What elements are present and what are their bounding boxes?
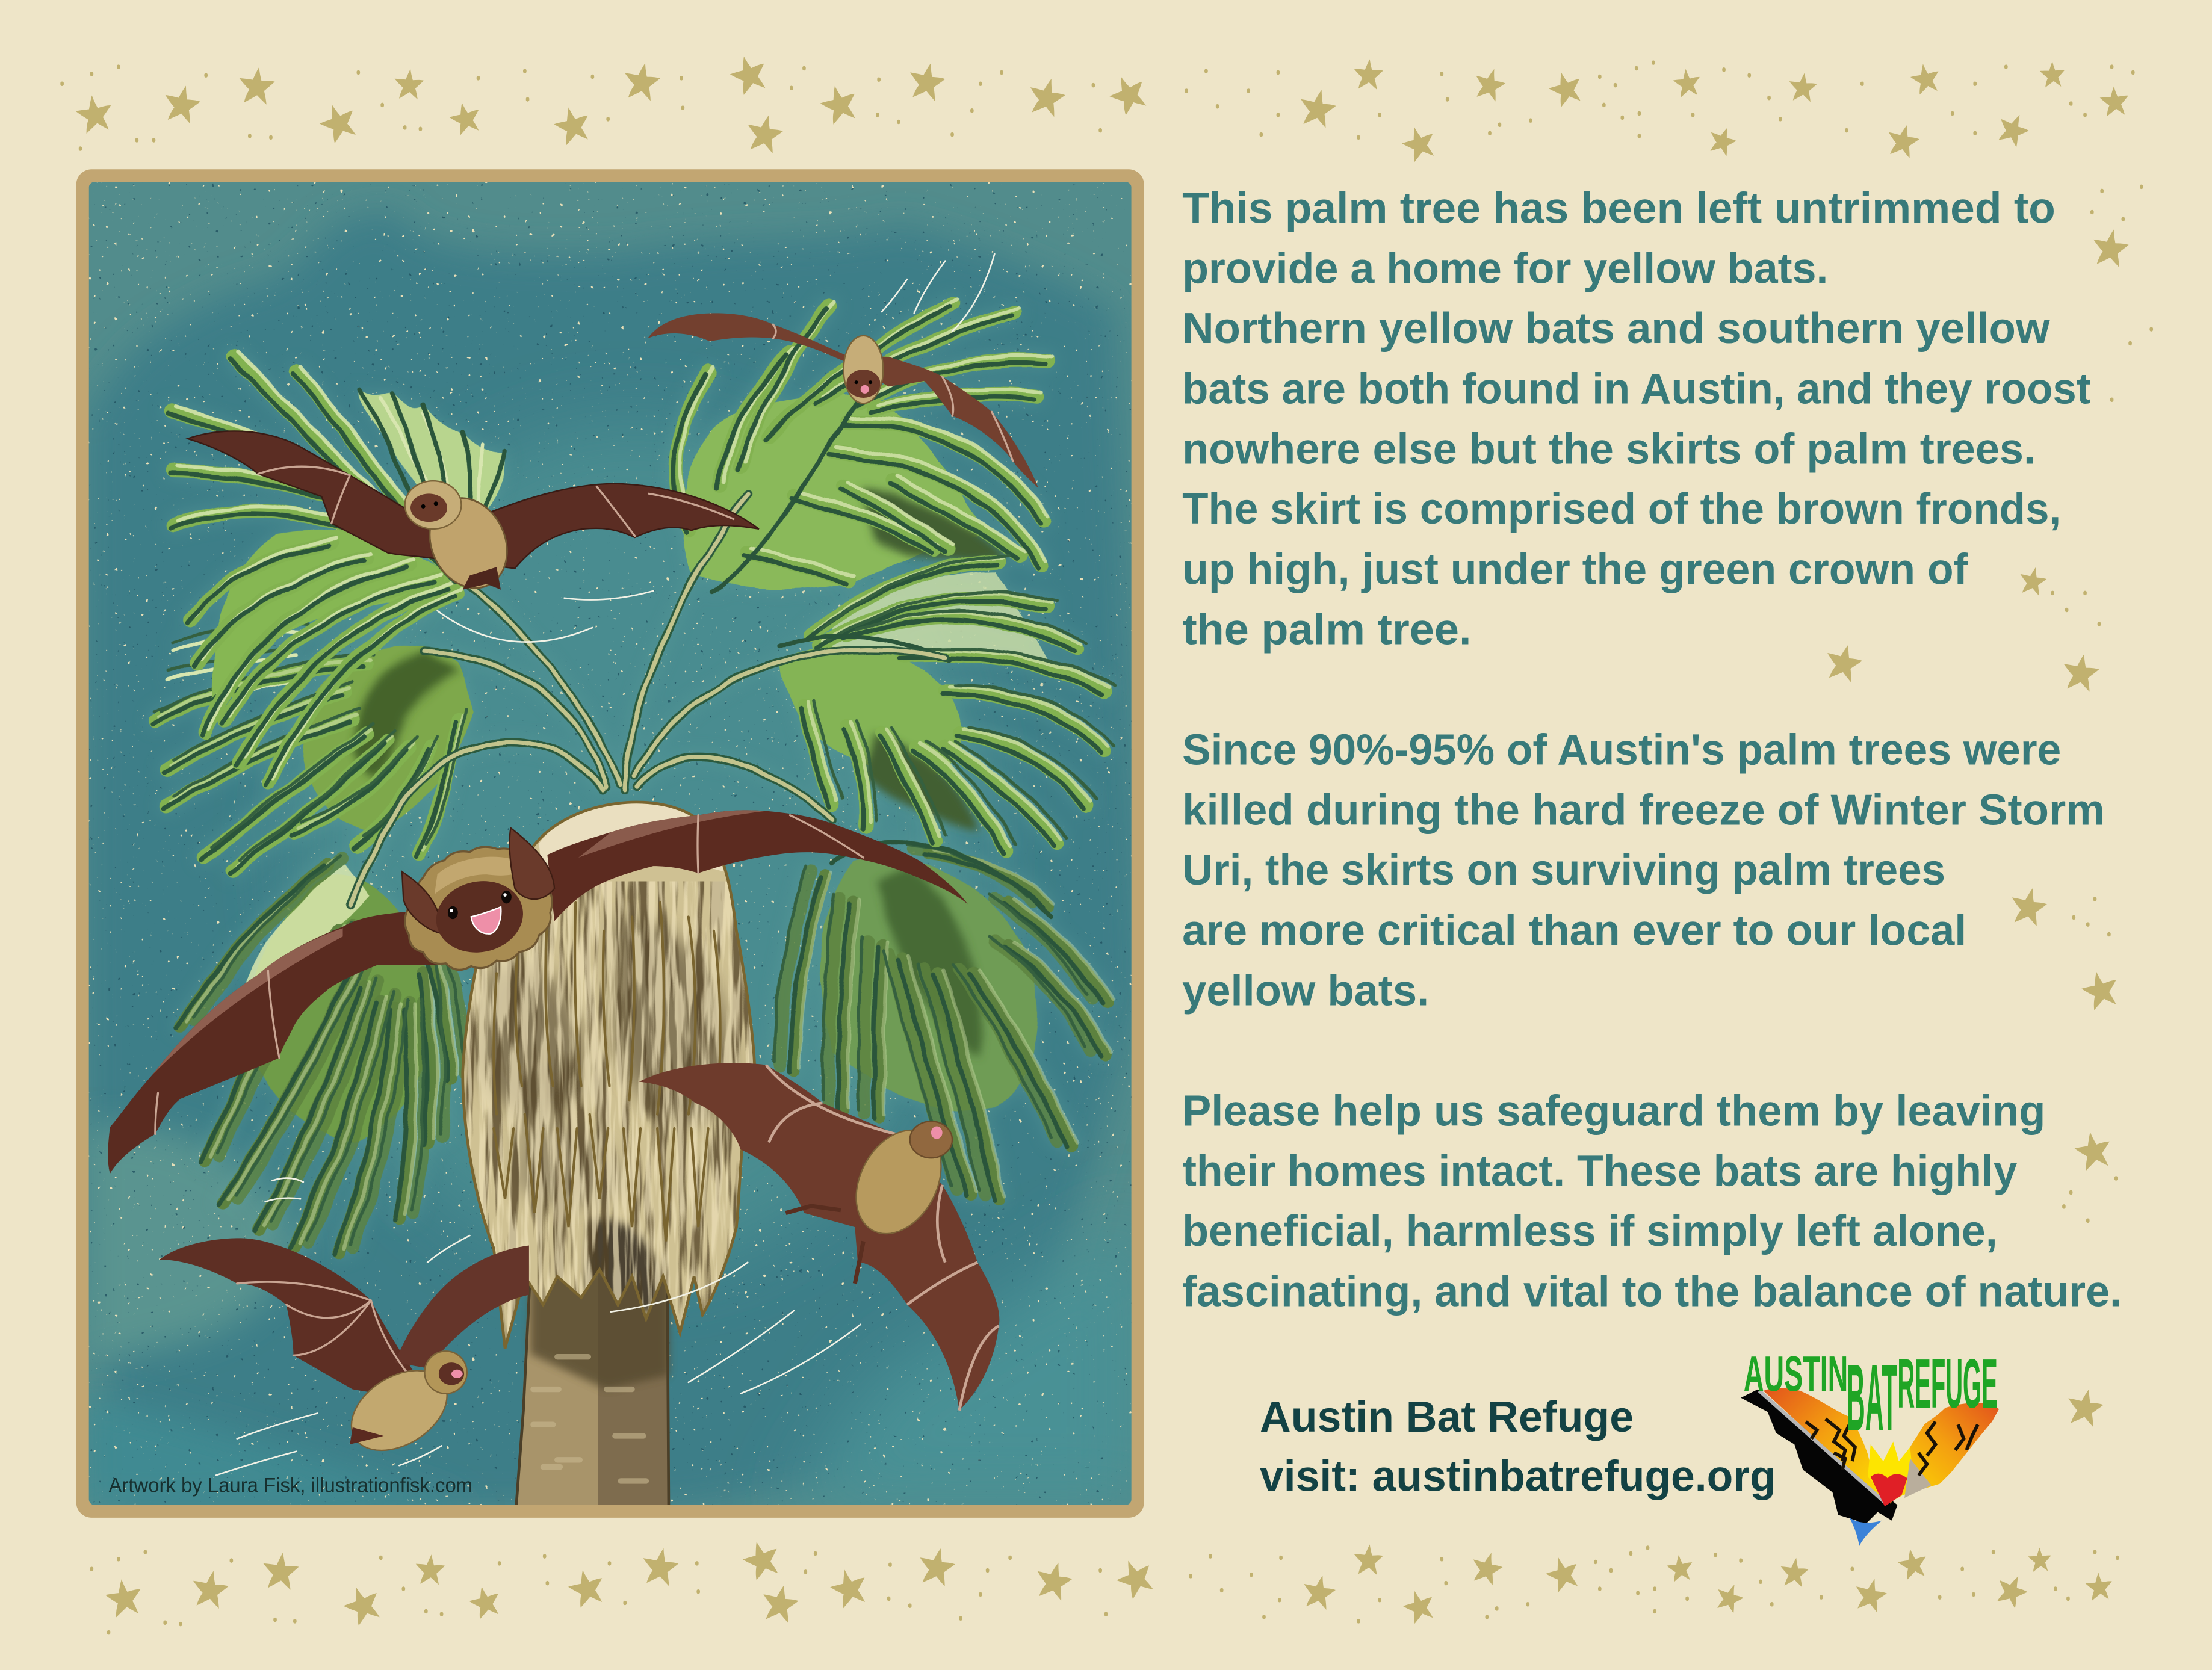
call to action: Austin Bat Refuge xyxy=(1260,1393,1634,1441)
orange right wing xyxy=(1888,1403,1999,1503)
star border: bottom xyxy=(103,1536,2113,1628)
skirt outline and strand tips xyxy=(463,802,755,1349)
bat: central front xyxy=(108,810,968,1174)
red M arches xyxy=(1871,1474,1907,1506)
left ear xyxy=(402,871,443,934)
paragraph: winter storm Uri: Uri, the skirts on surviving palm trees xyxy=(1182,846,1945,894)
paragraph: palm tree home: nowhere else but the skirts of palm trees. xyxy=(1182,424,2036,473)
bat: bottom left xyxy=(160,1238,529,1467)
bat: upper left xyxy=(188,431,759,601)
black left wing xyxy=(1741,1390,1897,1546)
dark patches xyxy=(472,965,586,1119)
paragraph: palm tree home: This palm tree has been left untrimmed to xyxy=(1182,184,2056,232)
paragraph: winter storm Uri: killed during the hard freeze of Winter Storm xyxy=(1182,785,2105,834)
grey wing bone xyxy=(1759,1391,1886,1503)
paragraph: palm tree home: the palm tree. xyxy=(1182,605,1472,654)
olive strand lines xyxy=(494,903,720,1241)
paragraph: winter storm Uri: Since 90%-95% of Austin's palm trees were xyxy=(1182,725,2061,774)
fur collar xyxy=(405,847,552,970)
frond: top right xyxy=(674,299,1052,592)
right wing xyxy=(547,810,968,921)
skirt strand mass xyxy=(451,790,762,1361)
dots: right margin xyxy=(2052,186,2151,1221)
open mouth xyxy=(471,907,501,934)
face xyxy=(430,873,530,960)
illustration: palm tree and bats xyxy=(85,182,1142,1509)
paragraph: winter storm Uri: yellow bats. xyxy=(1182,966,1429,1015)
logo wordmark: REFUGE xyxy=(1897,1346,1998,1423)
dark sky speckles xyxy=(89,182,1132,1505)
logo wordmark: BAT xyxy=(1847,1344,1897,1450)
logo wordmark xyxy=(1744,1344,1998,1450)
stars: right margin xyxy=(1823,227,2131,1428)
night sky background xyxy=(85,182,1142,1509)
bat: lower right xyxy=(639,1063,999,1411)
frond: lower left xyxy=(176,855,465,1254)
frond: right xyxy=(780,555,1115,853)
grey stepped tower xyxy=(1904,1458,1932,1498)
paragraph: palm tree home: The skirt is comprised of the brown fronds, xyxy=(1182,484,2061,533)
star dots: top xyxy=(62,62,2133,149)
call to action: visit: austinbatrefuge.org xyxy=(1260,1452,1776,1500)
logo: Austin Bat Refuge xyxy=(1741,1344,1999,1546)
frond: lower right xyxy=(775,842,1113,1201)
blue water tail xyxy=(1850,1518,1882,1546)
paragraph: please help: their homes intact. These bats are highly xyxy=(1182,1146,2018,1195)
logo wordmark: AUSTIN xyxy=(1744,1346,1848,1402)
motion lines xyxy=(216,254,994,1476)
paragraph: please help: beneficial, harmless if simply left alone, xyxy=(1182,1207,1998,1255)
left wing xyxy=(108,911,438,1174)
paragraph: palm tree home: Northern yellow bats and southern yellow xyxy=(1182,304,2050,353)
paragraph: please help: Please help us safeguard them by leaving xyxy=(1182,1086,2045,1135)
star border: top xyxy=(73,51,2130,164)
paragraph: palm tree home: up high, just under the green crown of xyxy=(1182,545,1968,593)
paragraph: winter storm Uri: are more critical than ever to our local xyxy=(1182,906,1966,954)
star dots: bottom xyxy=(91,1547,2118,1633)
right ear xyxy=(510,828,554,899)
paragraph: palm tree home: bats are both found in Austin, and they roost xyxy=(1182,364,2090,413)
illustration frame xyxy=(76,169,1144,1518)
orange left wing xyxy=(1764,1388,1886,1503)
body xyxy=(415,485,521,601)
sky speckles xyxy=(89,182,1132,1505)
paragraph: winter storm Uri xyxy=(1182,725,2105,1015)
head xyxy=(405,481,461,529)
paragraph: palm tree home: provide a home for yellow bats. xyxy=(1182,244,1829,292)
palm skirt: dried fronds xyxy=(451,790,762,1361)
frond stems xyxy=(350,493,945,906)
sun burst xyxy=(1868,1441,1913,1503)
artwork credit: Artwork by Laura Fisk, illustrationfisk.com xyxy=(108,1474,472,1497)
paragraph: please help xyxy=(1182,1086,2122,1316)
call to action xyxy=(1260,1393,1776,1500)
palm fronds xyxy=(152,299,1115,1254)
frond: center left drooping xyxy=(152,645,472,873)
frond: top left xyxy=(169,351,505,785)
paragraph: palm tree home xyxy=(1182,184,2090,654)
frond: dusty back left xyxy=(155,622,308,719)
bat: top right xyxy=(648,313,1038,488)
small bats xyxy=(1806,1419,1978,1476)
palm trunk xyxy=(516,1241,669,1505)
wings xyxy=(188,431,759,569)
paragraph: please help: fascinating, and vital to the balance of nature. xyxy=(1182,1267,2122,1316)
